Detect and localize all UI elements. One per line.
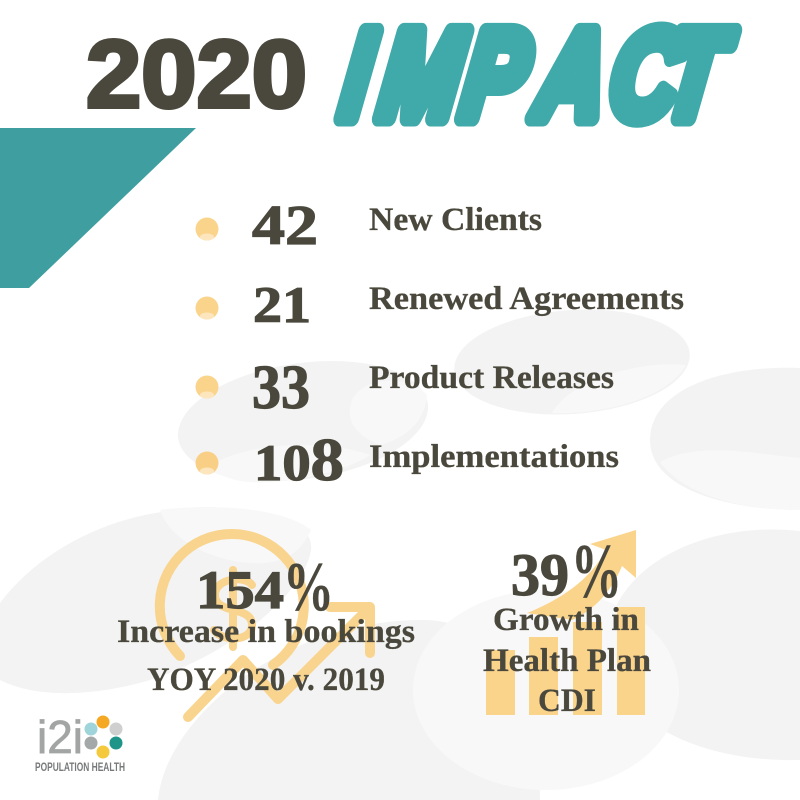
stat: health plan cdi: CDI bbox=[538, 683, 596, 719]
stat: bookings: 154 bbox=[196, 560, 284, 620]
stat: renewed agreements: 21 bbox=[253, 278, 311, 334]
stat: bookings bbox=[117, 549, 415, 698]
stat: health plan cdi: Growth in bbox=[493, 602, 639, 638]
title year: 2020 bbox=[86, 21, 307, 128]
stat: health plan cdi: % bbox=[571, 528, 622, 614]
stat: bookings: Increase in bookings bbox=[117, 614, 415, 650]
stat: health plan cdi: 39 bbox=[511, 542, 569, 608]
icon: bar chart with arrow bbox=[486, 530, 645, 715]
stat: new clients: New Clients bbox=[369, 202, 542, 238]
title bbox=[86, 4, 740, 145]
stat: renewed agreements: Renewed Agreements bbox=[369, 281, 684, 317]
stats list bbox=[196, 195, 684, 493]
stat: health plan cdi bbox=[483, 528, 651, 719]
title word: IMPACT bbox=[334, 4, 740, 145]
stat: implementations: 108 bbox=[254, 427, 344, 493]
stat: product releases: Product Releases bbox=[369, 360, 614, 396]
icon: revenue growth bbox=[160, 534, 370, 717]
logo: POPULATION HEALTH bbox=[35, 762, 125, 774]
stat: renewed agreements bbox=[196, 278, 684, 334]
stat: new clients bbox=[196, 195, 542, 257]
stat: new clients: 42 bbox=[252, 195, 318, 257]
stat: implementations: Implementations bbox=[369, 439, 619, 475]
stat: bookings: % bbox=[283, 549, 334, 626]
stat: product releases bbox=[196, 354, 614, 422]
stat: product releases: 33 bbox=[252, 354, 310, 422]
stat: bookings: YOY 2020 v. 2019 bbox=[147, 662, 385, 698]
logo: i2i bbox=[37, 711, 83, 763]
teal corner shape bbox=[0, 128, 196, 288]
logo bbox=[35, 711, 125, 774]
stat: implementations bbox=[196, 427, 619, 493]
stat: health plan cdi: Health Plan bbox=[483, 643, 651, 679]
